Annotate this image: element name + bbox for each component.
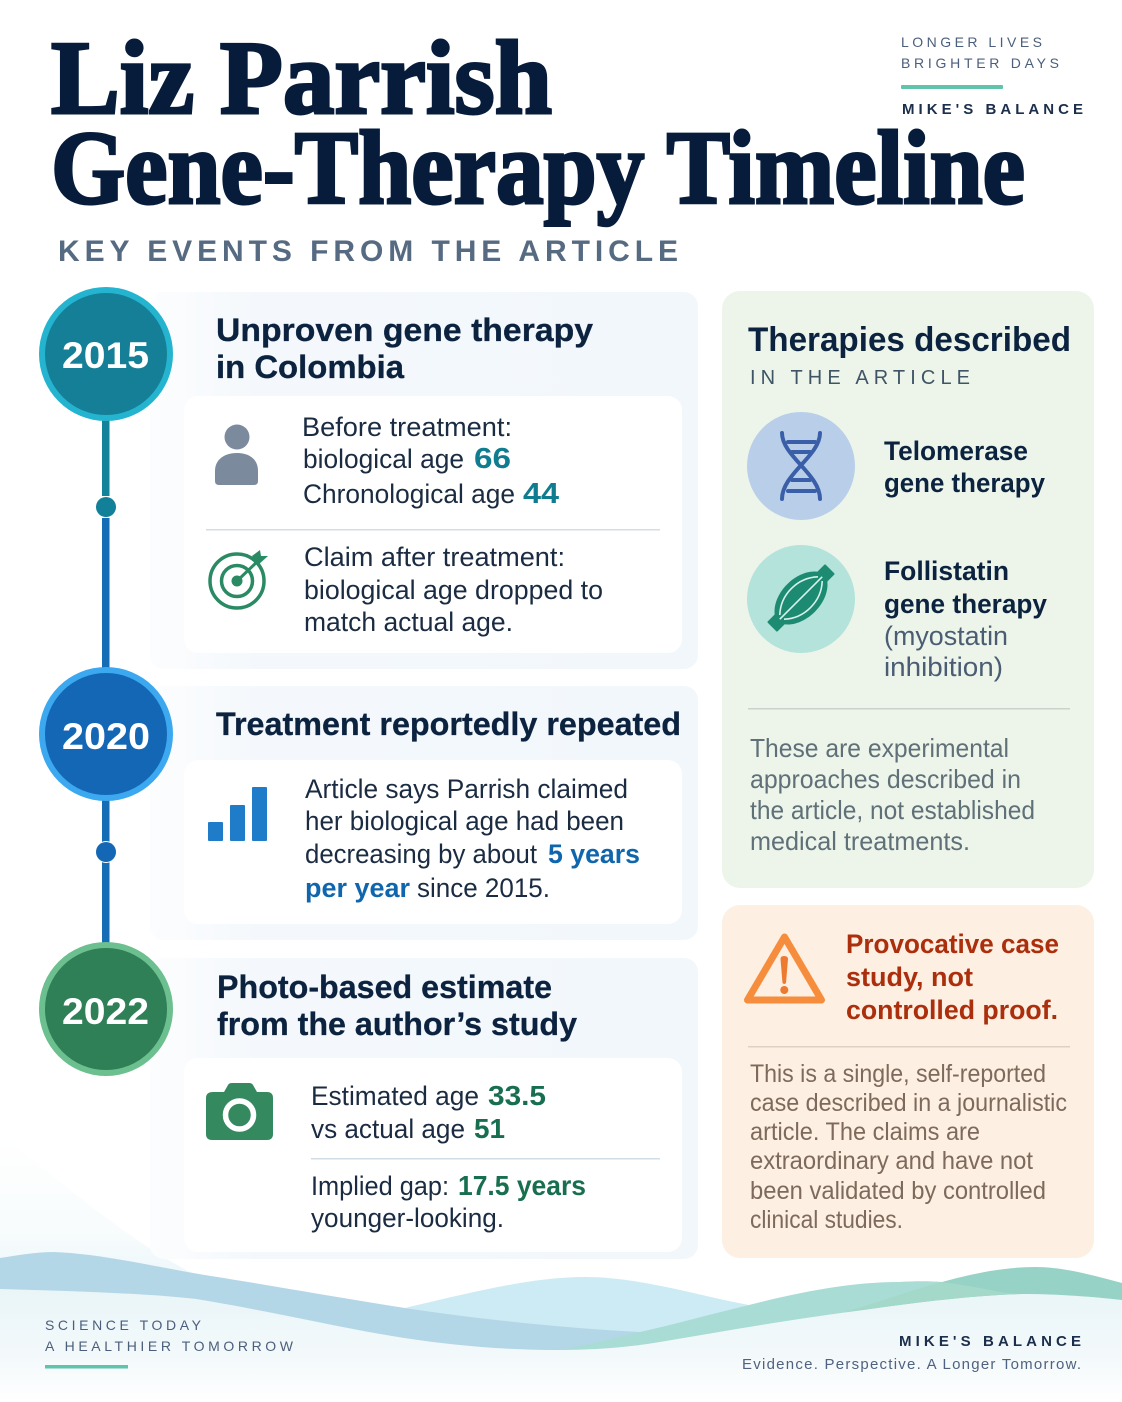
brand block top right: BRIGHTER DAYS <box>901 55 1059 71</box>
text: repeated claim: decreasing by about <box>305 839 537 869</box>
text: experimental note: approaches described in <box>750 764 1021 794</box>
text: follistatin: Follistatin <box>884 556 1009 586</box>
text: experimental note: the article, not established <box>750 795 1035 825</box>
heading: 2022: from the author’s study <box>217 1006 577 1042</box>
year marker: 2020 <box>39 667 173 801</box>
text: claim after treatment: biological age dropped to <box>304 575 603 605</box>
year marker: 2022 <box>39 942 173 1076</box>
text: telomerase: gene therapy <box>884 468 1045 498</box>
heading: provocative case study: study, not <box>846 962 973 992</box>
text: follistatin <box>884 556 1047 682</box>
heading: 2022: Photo-based estimate <box>217 969 552 1005</box>
title <box>51 19 1025 226</box>
footer right brand: Evidence. Perspective. A Longer Tomorrow. <box>742 1356 1081 1373</box>
text: implied gap: 17.5 years <box>458 1170 586 1201</box>
text: before treatment: Chronological age <box>303 479 515 509</box>
brand block top right: MIKE'S BALANCE <box>902 101 1083 118</box>
heading: provocative case study <box>846 929 1059 1025</box>
text: repeated claim: her biological age had been <box>305 806 624 836</box>
icon: warning triangle <box>748 937 822 1000</box>
heading: 2015 <box>216 312 593 385</box>
icon: DNA <box>747 412 855 520</box>
heading: 2020: Treatment reportedly repeated <box>216 706 681 742</box>
text: caution note: article. The claims are <box>750 1118 980 1146</box>
icon: camera <box>206 1083 273 1140</box>
footer right brand: MIKE'S BALANCE <box>899 1333 1081 1350</box>
heading: 2022 <box>217 969 577 1042</box>
text: caution note: case described in a journalistic <box>750 1089 1067 1117</box>
text: estimated age: 51 <box>474 1113 505 1144</box>
year marker: 2015: 2015 <box>62 335 149 376</box>
text: caution note: This is a single, self-reported <box>750 1060 1046 1088</box>
text: before treatment: Before treatment: <box>302 412 512 442</box>
icon: bar chart <box>208 787 267 841</box>
background hills and waves <box>0 1135 1122 1402</box>
text: experimental note: medical treatments. <box>750 826 970 856</box>
text: experimental note: These are experimental <box>750 733 1009 763</box>
text: repeated claim: Article says Parrish claimed <box>305 774 628 804</box>
text: experimental note <box>750 733 1035 856</box>
icon: person <box>215 424 258 485</box>
text: before treatment: biological age <box>303 444 464 474</box>
panel: 2022 <box>150 958 698 1259</box>
year marker: 2022: 2022 <box>62 991 149 1032</box>
text: claim after treatment: Claim after treatment: <box>304 542 565 572</box>
text: repeated claim: 5 years <box>548 839 640 869</box>
heading: 2015: in Colombia <box>216 349 404 385</box>
text: telomerase <box>884 436 1045 498</box>
text: caution note: been validated by controlled <box>750 1177 1046 1205</box>
text: implied gap: younger-looking. <box>311 1203 504 1233</box>
text: caution note <box>750 1060 1067 1234</box>
year marker: 2020: 2020 <box>62 716 150 757</box>
footer left tagline: SCIENCE TODAY <box>45 1317 202 1333</box>
text: before treatment: 66 <box>474 443 511 475</box>
text: repeated claim <box>305 774 640 903</box>
text: repeated claim: per year <box>305 873 410 903</box>
icon: muscle <box>747 545 855 653</box>
title: Liz Parrish <box>51 19 552 136</box>
heading: provocative case study: Provocative case <box>846 929 1059 959</box>
text: caution note: extraordinary and have not <box>750 1147 1033 1175</box>
brand block top right: LONGER LIVES <box>901 34 1042 50</box>
subheading: in the article: IN THE ARTICLE <box>750 367 970 389</box>
footer right brand <box>742 1333 1081 1373</box>
footer left tagline: A HEALTHIER TOMORROW <box>45 1338 294 1354</box>
panel: 2020 <box>150 686 698 940</box>
panel: therapies described <box>722 291 1094 888</box>
text: telomerase: Telomerase <box>884 436 1028 466</box>
panel: caution <box>722 905 1094 1258</box>
text: caution note: clinical studies. <box>750 1206 903 1234</box>
text: estimated age: vs actual age <box>311 1114 465 1144</box>
icon: target <box>210 550 268 608</box>
text: before treatment <box>302 412 559 510</box>
heading: provocative case study: controlled proof. <box>846 995 1058 1025</box>
heading: 2015: Unproven gene therapy <box>216 312 593 348</box>
timeline spine <box>95 420 117 946</box>
text: estimated age <box>311 1080 546 1144</box>
text: follistatin: gene therapy <box>884 589 1047 619</box>
title: Gene-Therapy Timeline <box>51 109 1025 226</box>
text: claim after treatment <box>304 542 603 637</box>
brand block top right <box>901 34 1083 118</box>
text: before treatment: 44 <box>523 478 559 510</box>
text: repeated claim: since 2015. <box>417 873 550 903</box>
text: estimated age: Estimated age <box>311 1081 479 1111</box>
heading: therapies: Therapies described <box>748 321 1071 359</box>
footer left tagline <box>45 1317 294 1368</box>
text: implied gap <box>311 1170 586 1233</box>
text: follistatin: (myostatin <box>884 621 1008 651</box>
year marker: 2015 <box>39 287 173 421</box>
text: estimated age: 33.5 <box>488 1080 546 1111</box>
text: implied gap: Implied gap: <box>311 1171 449 1201</box>
panel: 2015 <box>150 292 698 669</box>
text: follistatin: inhibition) <box>884 652 1003 682</box>
text: claim after treatment: match actual age. <box>304 607 513 637</box>
subtitle: KEY EVENTS FROM THE ARTICLE <box>58 235 678 268</box>
